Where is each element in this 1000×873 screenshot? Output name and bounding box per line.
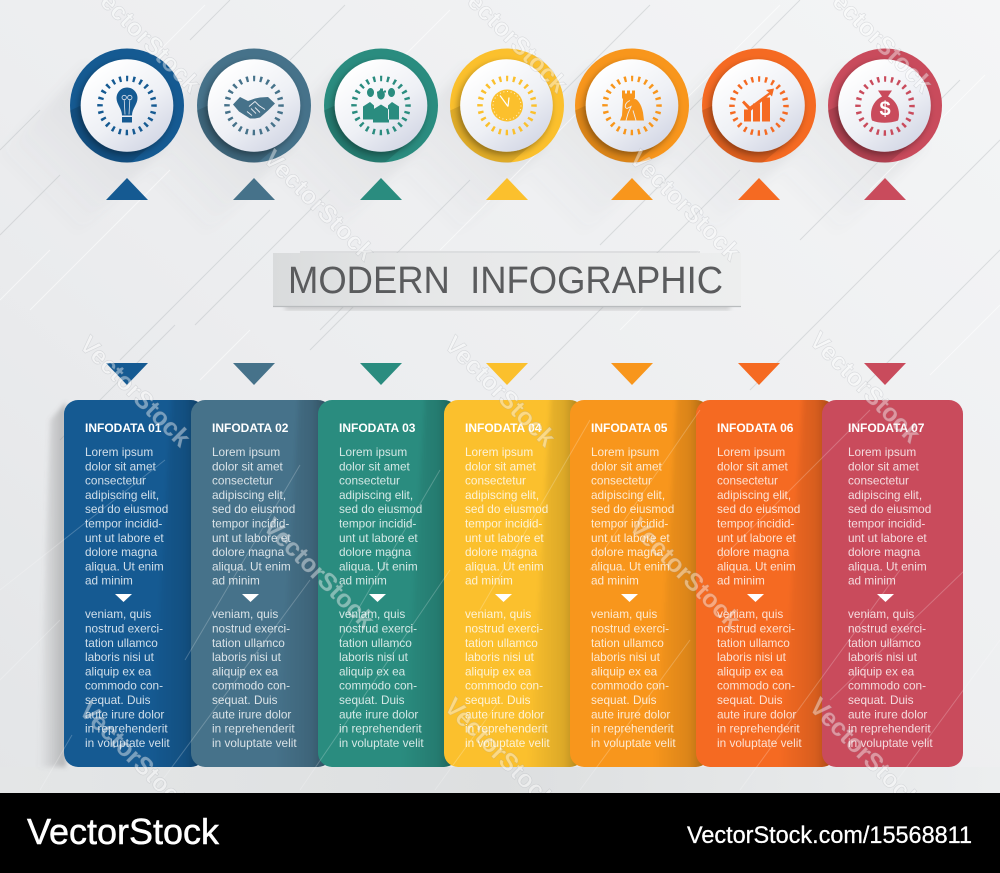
body text 04: consectetur [465,474,526,488]
background diagonal lines [0,0,1000,440]
body text 02: in voluptate velit [212,736,297,750]
body text 05: commodo con- [591,679,669,693]
body text 02: nostrud exerci- [212,622,290,636]
body text 05: nostrud exerci- [591,622,669,636]
body text 06: aliquip ex ea [717,664,784,678]
panel: infodata 04 [444,400,577,767]
panel: infodata 05 [570,400,703,767]
body text 05: sequat. Duis [591,693,657,707]
body text 01: laboris nisi ut [85,650,155,664]
icon: rising bar chart [742,88,774,122]
body text 05: in reprehenderit [591,722,674,736]
body text 04: aliqua. Ut enim [465,559,544,573]
body text 05: consectetur [591,474,652,488]
body text 04: sequat. Duis [465,693,531,707]
body text 06: ad minim [717,574,765,588]
body text 07: aute irure dolor [848,707,927,721]
body text 02: dolore magna [212,545,285,559]
body text 07: veniam, quis [848,607,914,621]
panel: infodata 02 [191,400,325,767]
icon: light bulb [116,88,138,122]
watermarks: VectorStock [804,692,926,814]
watermarks: VectorStock [439,692,561,814]
watermarks: VectorStock [258,144,380,266]
body text 05: aute irure dolor [591,707,670,721]
heading 04: INFODATA 04 [465,421,542,435]
circle 6: growth chart [702,48,816,163]
body text 03: ad minim [339,574,387,588]
footer logo: VectorStock [27,811,220,852]
body text 05: dolor sit amet [591,459,663,473]
body text 02: aliquip ex ea [212,664,279,678]
watermarks: VectorStock [74,330,196,452]
long shadows behind the top circles [0,66,925,242]
body text 07: aliqua. Ut enim [848,559,927,573]
body text 07: in voluptate velit [848,736,933,750]
body text 04: tempor incidid- [465,516,542,530]
body text 01: Lorem ipsum [85,445,153,459]
body text 07: dolore magna [848,545,921,559]
body text 01: in reprehenderit [85,722,168,736]
body text 04: tation ullamco [465,636,538,650]
body text 04: commodo con- [465,679,543,693]
body text 01: unt ut labore et [85,531,164,545]
body text 06: consectetur [717,474,778,488]
body text 03: aliqua. Ut enim [339,559,418,573]
body text 02: sed do eiusmod [212,502,295,516]
overlay diagonal lines over panels [0,410,1000,790]
body text 05: aliquip ex ea [591,664,658,678]
body text 01: dolore magna [85,545,158,559]
body text 05: dolore magna [591,545,664,559]
body text 07: laboris nisi ut [848,650,918,664]
body text 01: aliquip ex ea [85,664,152,678]
body text 01: nostrud exerci- [85,622,163,636]
body text 06: sed do eiusmod [717,502,800,516]
body text 03: veniam, quis [339,607,405,621]
body text 02: aliqua. Ut enim [212,559,291,573]
body text 04: in reprehenderit [465,722,548,736]
icon: handshake [233,97,275,118]
heading 03: INFODATA 03 [339,421,416,435]
heading 05: INFODATA 05 [591,421,668,435]
body text 04: aliquip ex ea [465,664,532,678]
icon: money bag: $ [879,98,891,120]
body text 01: ad minim [85,574,133,588]
body text 03: consectetur [339,474,400,488]
circle 4: clock [450,48,564,163]
body text 03: in reprehenderit [339,722,422,736]
body text 05: ad minim [591,574,639,588]
body text 02: laboris nisi ut [212,650,282,664]
body text 07: in reprehenderit [848,722,931,736]
body text 06: aliqua. Ut enim [717,559,796,573]
body text 04: unt ut labore et [465,531,544,545]
body text 04: nostrud exerci- [465,622,543,636]
body text 03: tation ullamco [339,636,412,650]
body text 03: sed do eiusmod [339,502,422,516]
circle 2: handshake [197,48,311,163]
heading 07: INFODATA 07 [848,421,925,435]
body text 01: sequat. Duis [85,693,151,707]
footer image id: VectorStock.com/15568811 [687,822,972,849]
watermarks: VectorStock [804,326,926,448]
body text 01: adipiscing elit, [85,488,159,502]
watermarks: VectorStock [624,512,746,634]
body text 03: in voluptate velit [339,736,424,750]
body text 06: nostrud exerci- [717,622,795,636]
heading 02: INFODATA 02 [212,421,289,435]
body text 04: dolor sit amet [465,459,537,473]
body text 03: aliquip ex ea [339,664,406,678]
body text 02: in reprehenderit [212,722,295,736]
body text 01: tempor incidid- [85,516,162,530]
body text 06: tempor incidid- [717,516,794,530]
body text 01: aliqua. Ut enim [85,559,164,573]
body text 06: unt ut labore et [717,531,796,545]
body text 02: tempor incidid- [212,516,289,530]
body text 05: unt ut labore et [591,531,670,545]
body text 03: dolor sit amet [339,459,411,473]
circle 7: money bag [828,48,942,163]
body text 02: aute irure dolor [212,707,291,721]
body text 07: aliquip ex ea [848,664,915,678]
body text 07: tempor incidid- [848,516,925,530]
body text 03: tempor incidid- [339,516,416,530]
panel: infodata 06 [696,400,829,767]
title text: MODERN INFOGRAPHIC [288,260,723,302]
circle 1: idea [70,48,184,163]
body text 06: commodo con- [717,679,795,693]
body text 07: Lorem ipsum [848,445,916,459]
body text 02: ad minim [212,574,260,588]
body text 01: tation ullamco [85,636,158,650]
body text 04: in voluptate velit [465,736,550,750]
watermarks: VectorStock [74,696,196,818]
body text 04: aute irure dolor [465,707,544,721]
body text 06: aute irure dolor [717,707,796,721]
body text 02: Lorem ipsum [212,445,280,459]
body text 05: veniam, quis [591,607,657,621]
body text 03: Lorem ipsum [339,445,407,459]
circle 3: team [324,48,438,163]
panel: infodata 07 [822,400,963,767]
body text 03: unt ut labore et [339,531,418,545]
body text 07: adipiscing elit, [848,488,922,502]
body text 01: sed do eiusmod [85,502,168,516]
body text 07: sed do eiusmod [848,502,931,516]
body text 05: sed do eiusmod [591,502,674,516]
body text 02: sequat. Duis [212,693,278,707]
body text 06: laboris nisi ut [717,650,787,664]
body text 02: consectetur [212,474,273,488]
icon: clock [491,90,523,122]
floor band under panels [0,767,1000,793]
down triangle row [106,363,906,385]
watermarks: VectorStock [258,512,380,634]
heading 01: INFODATA 01 [85,421,162,435]
body text 04: ad minim [465,574,513,588]
panel: infodata 03 [318,400,451,767]
body text 03: aute irure dolor [339,707,418,721]
body text 05: tation ullamco [591,636,664,650]
body text 07: ad minim [848,574,896,588]
body text 04: veniam, quis [465,607,531,621]
body text 05: adipiscing elit, [591,488,665,502]
body text 06: in reprehenderit [717,722,800,736]
body text 06: Lorem ipsum [717,445,785,459]
body text 07: nostrud exerci- [848,622,926,636]
body text 06: dolor sit amet [717,459,789,473]
body text 05: laboris nisi ut [591,650,661,664]
body text 03: laboris nisi ut [339,650,409,664]
body text 02: veniam, quis [212,607,278,621]
body text 06: veniam, quis [717,607,783,621]
body text 06: tation ullamco [717,636,790,650]
body text 02: commodo con- [212,679,290,693]
body text 03: commodo con- [339,679,417,693]
body text 02: unt ut labore et [212,531,291,545]
title banner [273,252,741,310]
body text 03: dolore magna [339,545,412,559]
body text 06: dolore magna [717,545,790,559]
left panel cast shadow [38,402,66,767]
watermarks: VectorStock [624,144,746,266]
body text 01: dolor sit amet [85,459,157,473]
body text 06: adipiscing elit, [717,488,791,502]
body text 03: adipiscing elit, [339,488,413,502]
body text 01: veniam, quis [85,607,151,621]
body text 04: dolore magna [465,545,538,559]
icon: chess rook and knight [620,90,644,120]
watermarks: VectorStock [439,330,561,452]
body text 05: aliqua. Ut enim [591,559,670,573]
body text 03: sequat. Duis [339,693,405,707]
body text 04: laboris nisi ut [465,650,535,664]
body text 01: consectetur [85,474,146,488]
icon: team of people [363,88,399,122]
body text 07: tation ullamco [848,636,921,650]
body text 01: commodo con- [85,679,163,693]
body text 01: in voluptate velit [85,736,170,750]
body text 02: adipiscing elit, [212,488,286,502]
circle 5: strategy [575,48,689,163]
panel: infodata 01 [64,400,198,767]
body text 07: sequat. Duis [848,693,914,707]
body text 04: sed do eiusmod [465,502,548,516]
body text 03: nostrud exerci- [339,622,417,636]
body text 06: in voluptate velit [717,736,802,750]
body text 07: consectetur [848,474,909,488]
body text 02: dolor sit amet [212,459,284,473]
small white arrows in panels [115,594,894,602]
body text 07: unt ut labore et [848,531,927,545]
body text 01: aute irure dolor [85,707,164,721]
footer bar [0,793,1000,873]
body text 07: dolor sit amet [848,459,920,473]
body text 04: adipiscing elit, [465,488,539,502]
body text 07: commodo con- [848,679,926,693]
heading 06: INFODATA 06 [717,421,794,435]
body text 05: Lorem ipsum [591,445,659,459]
body text 05: tempor incidid- [591,516,668,530]
body text 04: Lorem ipsum [465,445,533,459]
body text 06: sequat. Duis [717,693,783,707]
body text 05: in voluptate velit [591,736,676,750]
body text 02: tation ullamco [212,636,285,650]
up triangle row [106,178,906,200]
